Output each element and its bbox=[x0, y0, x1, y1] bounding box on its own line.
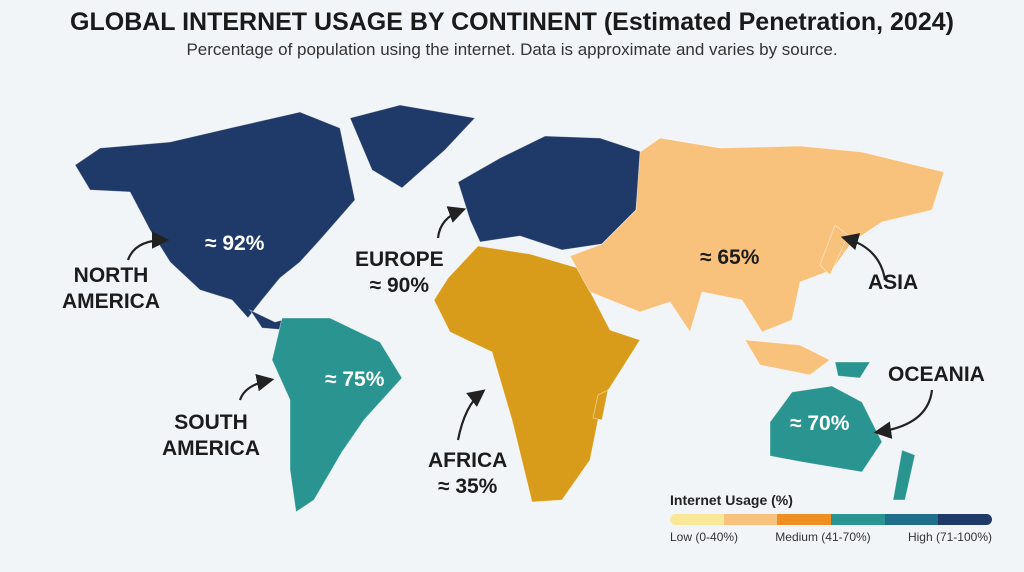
label: africa bbox=[428, 449, 507, 498]
label: asia: ASIA bbox=[868, 271, 918, 294]
pct: asia: ≈ 65% bbox=[700, 246, 759, 269]
label: europe: ≈ 90% bbox=[370, 274, 429, 297]
legend labels bbox=[670, 530, 992, 544]
south america bbox=[272, 318, 402, 512]
label: europe bbox=[355, 248, 444, 297]
legend labels: High (71-100%) bbox=[908, 530, 992, 544]
label: north america: NORTH bbox=[74, 264, 148, 287]
label: south america: AMERICA bbox=[162, 437, 260, 460]
africa bbox=[434, 246, 640, 502]
title: GLOBAL INTERNET USAGE BY CONTINENT (Estimated Penetration, 2024) bbox=[70, 8, 954, 36]
label: oceania: OCEANIA bbox=[888, 363, 985, 386]
legend labels: Medium (41-70%) bbox=[775, 530, 871, 544]
legend title: Internet Usage (%) bbox=[670, 492, 793, 508]
legend labels: Low (0-40%) bbox=[670, 530, 738, 544]
legend bar bbox=[670, 514, 992, 525]
pct: north america: ≈ 92% bbox=[205, 232, 264, 255]
label: south america bbox=[162, 411, 260, 460]
subtitle: Percentage of population using the internet. Data is approximate and varies by source. bbox=[186, 40, 838, 59]
legend bbox=[670, 492, 992, 544]
pct: south america: ≈ 75% bbox=[325, 368, 384, 391]
asia bbox=[570, 138, 944, 375]
label: africa: ≈ 35% bbox=[438, 475, 497, 498]
label: africa: AFRICA bbox=[428, 449, 507, 472]
label: south america: SOUTH bbox=[174, 411, 248, 434]
pct: oceania: ≈ 70% bbox=[790, 412, 849, 435]
label: north america: AMERICA bbox=[62, 290, 160, 313]
europe bbox=[458, 136, 642, 250]
label: europe: EUROPE bbox=[355, 248, 444, 271]
north america bbox=[75, 105, 475, 330]
oceania bbox=[770, 362, 915, 500]
label: north america bbox=[62, 264, 160, 313]
arrows bbox=[128, 210, 932, 440]
